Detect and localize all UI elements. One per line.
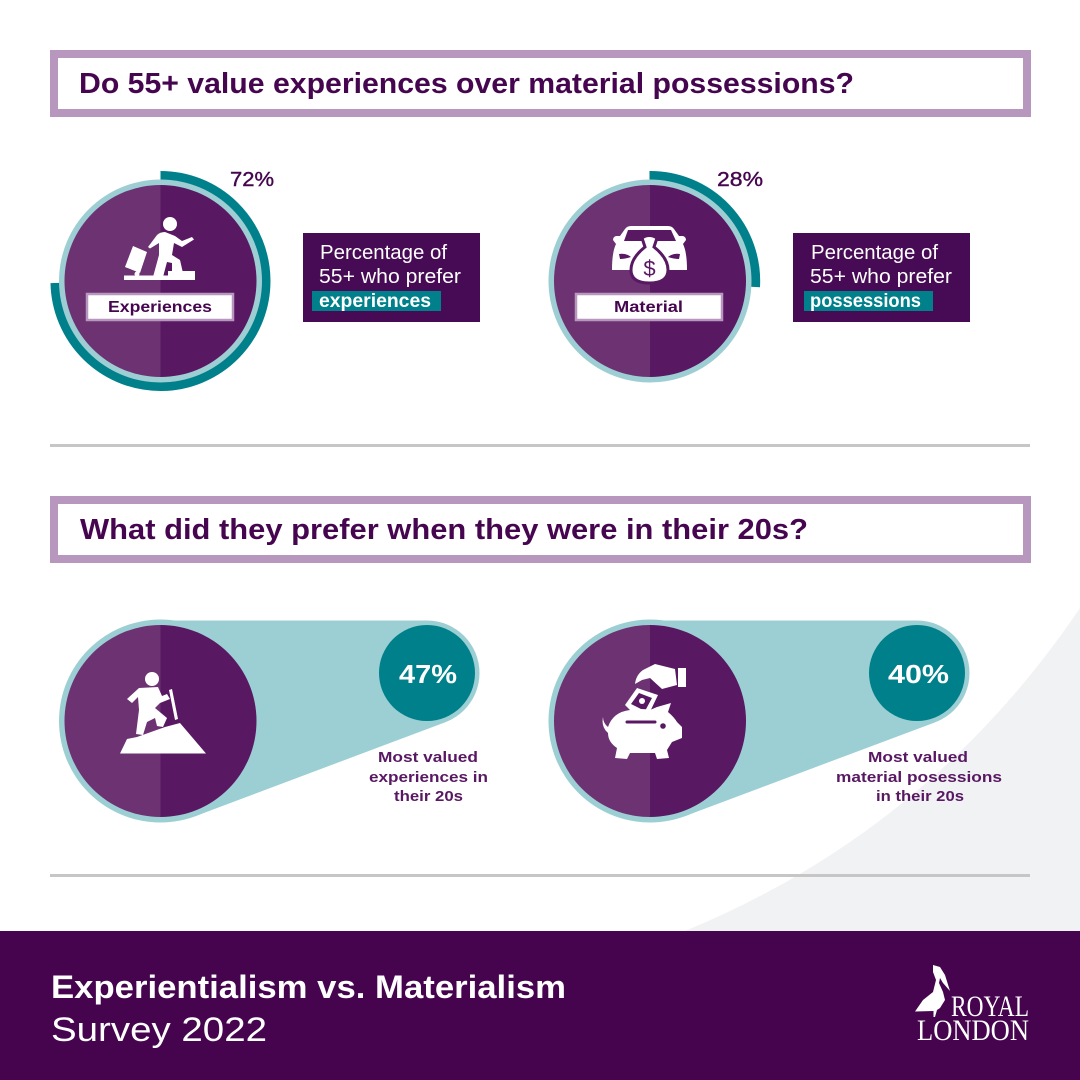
caption: most valued experiences: their 20s <box>394 788 463 805</box>
text box: prefer possessions <box>793 233 970 322</box>
donut: experiences 72% <box>55 176 266 386</box>
text box: prefer possessions: Percentage of <box>811 242 938 264</box>
stat circle: 47%: 47% <box>399 659 457 689</box>
label: Material <box>576 294 722 320</box>
heading: experiences vs possessions: Do 55+ value experiences over material possessions? <box>79 68 854 100</box>
icon: traveller with suitcase <box>124 217 195 280</box>
caption: most valued experiences: experiences in <box>369 769 488 786</box>
callout: material 40% <box>548 620 970 822</box>
caption: most valued material possessions: material posessions <box>836 769 1002 786</box>
text box: prefer possessions: 55+ who prefer <box>810 266 952 288</box>
label: Experiences: Experiences <box>108 299 212 316</box>
heading: experiences vs possessions <box>54 54 1027 113</box>
icon: piggy bank with hand <box>603 664 686 759</box>
text box: prefer possessions: possessions <box>810 291 921 312</box>
heading: preferences in their 20s: What did they prefer when they were in their 20s? <box>80 514 808 546</box>
logo: Royal London pelican: LONDON <box>917 1014 1029 1047</box>
label: Material: Material <box>614 299 683 316</box>
text box: prefer experiences: Percentage of <box>320 242 447 264</box>
text box: prefer experiences: 55+ who prefer <box>319 266 461 288</box>
donut: material 28% <box>548 175 756 382</box>
footer title: Survey 2022 <box>51 1011 267 1049</box>
label: Experiences <box>87 294 233 320</box>
text box: prefer experiences <box>303 233 480 322</box>
logo: Royal London pelican <box>915 965 1029 1047</box>
callout: experiences 47% <box>59 620 480 822</box>
logo: Royal London pelican: ROYAL <box>951 990 1029 1023</box>
value: 28%: 28% <box>717 169 763 191</box>
icon: cars and money bag: $ <box>643 256 656 281</box>
footer band <box>0 931 1080 1080</box>
caption: most valued material possessions: in their 20s <box>876 788 964 805</box>
stat circle: 40% <box>869 625 965 721</box>
heading: preferences in their 20s <box>54 500 1027 559</box>
caption: most valued experiences: Most valued <box>378 749 478 766</box>
caption: most valued material possessions: Most valued <box>868 749 968 766</box>
caption: most valued experiences <box>369 749 488 805</box>
footer title: Experientialism vs. Materialism <box>51 969 566 1005</box>
stat circle: 47% <box>379 625 475 721</box>
stat circle: 40%: 40% <box>888 659 949 689</box>
background curved shape <box>685 608 1080 931</box>
icon: cars and money bag <box>612 226 687 283</box>
caption: most valued material possessions <box>836 749 1002 805</box>
icon: hiker on mountain <box>120 672 206 754</box>
text box: prefer experiences: experiences <box>319 291 431 312</box>
footer title <box>51 969 566 1049</box>
value: 72%: 72% <box>230 169 274 191</box>
